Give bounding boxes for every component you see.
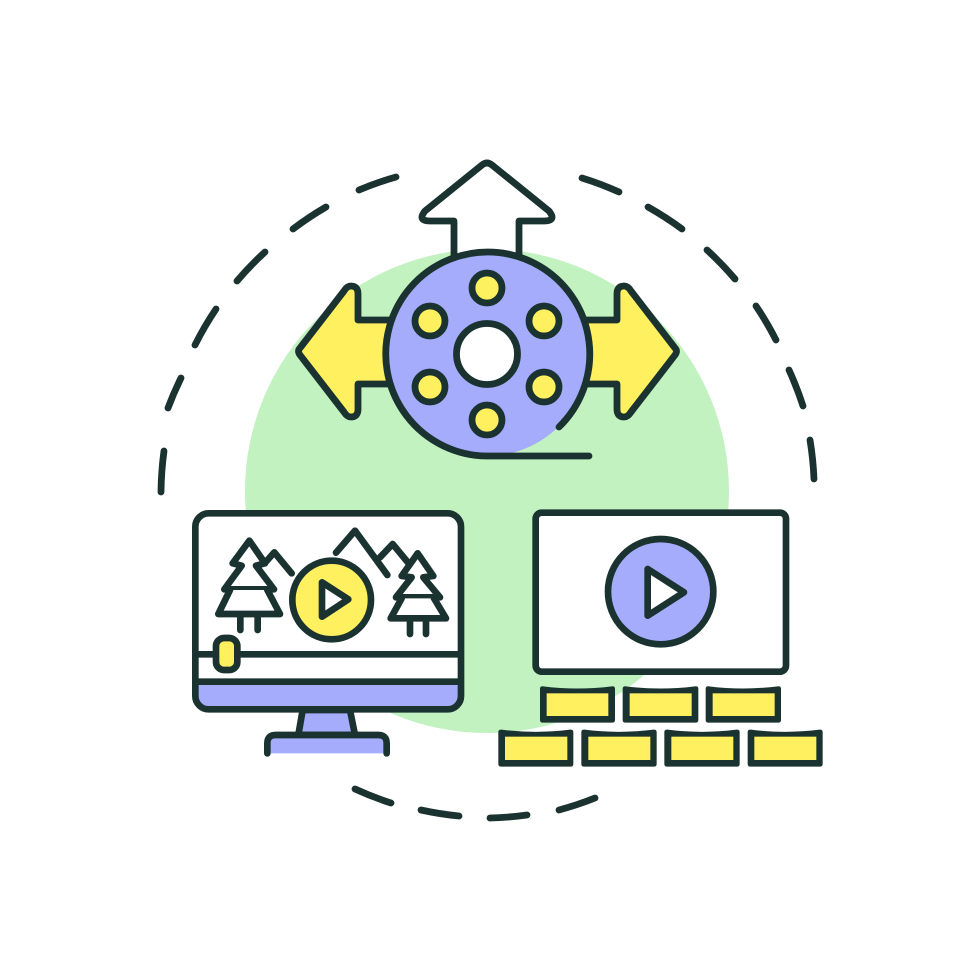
reel hub [456, 324, 518, 384]
scrubber handle [216, 638, 237, 670]
film reel [385, 252, 590, 456]
desktop monitor [195, 513, 461, 753]
reel holes [415, 273, 559, 435]
monitor stand [298, 710, 355, 735]
landscape: mountains and trees [218, 531, 446, 634]
purple play button [608, 539, 713, 644]
arrow: right [583, 286, 676, 417]
dashed ring [161, 177, 814, 818]
monitor lower bar [195, 682, 461, 709]
arrow: left [298, 286, 392, 417]
video player window [498, 513, 823, 767]
yellow play button [292, 561, 371, 639]
bricks [498, 686, 823, 767]
background green circle [245, 249, 729, 733]
arrow: up [422, 163, 552, 258]
monitor base [267, 735, 387, 753]
monitor body [195, 513, 461, 709]
